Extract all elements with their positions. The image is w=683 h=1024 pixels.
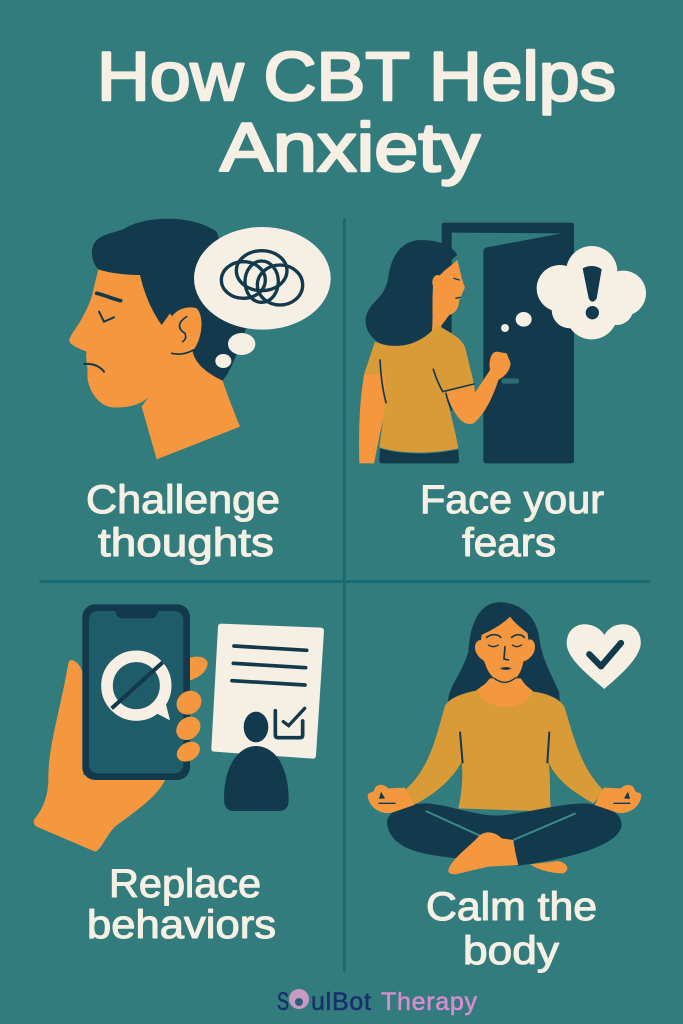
- panel: challenge thoughts: [69, 219, 331, 565]
- title: Anxiety: [220, 109, 481, 186]
- icon: brain logo replacing the letter o: o: [296, 997, 302, 1007]
- label: calm the body: body: [463, 929, 559, 973]
- footer logo: SoulBot Therapy: ulBot: [311, 988, 371, 1016]
- title: How CBT Helps: [97, 38, 616, 115]
- right hand in mudra: [595, 785, 641, 813]
- footer logo: SoulBot Therapy: S: [277, 988, 289, 1016]
- title: [97, 38, 616, 186]
- label: calm the body: [426, 885, 597, 973]
- icon: brain logo replacing the letter o: [289, 989, 309, 1009]
- icon: anxious head in profile with thought bubble: [69, 219, 331, 459]
- label: replace behaviors: behaviors: [87, 903, 276, 947]
- label: face your fears: fears: [462, 521, 556, 565]
- label: challenge thoughts: Challenge: [86, 478, 280, 522]
- label: replace behaviors: Replace: [109, 862, 261, 906]
- footer logo: SoulBot Therapy: [277, 988, 478, 1016]
- panel: face your fears: [359, 223, 646, 565]
- label: face your fears: Face your: [420, 478, 604, 522]
- left hand in mudra: [368, 785, 414, 813]
- label: face your fears: [420, 478, 604, 565]
- icon: woman meditating with heart check: [368, 602, 641, 874]
- icon: hand holding phone with blocked chat symbol: [34, 604, 324, 852]
- label: challenge thoughts: [86, 478, 280, 565]
- panel: replace behaviors: [34, 604, 324, 947]
- label: challenge thoughts: thoughts: [98, 521, 274, 565]
- icon: woman at an open door with alarm cloud: [359, 223, 646, 463]
- panel: calm the body: [368, 602, 641, 973]
- label: calm the body: Calm the: [426, 885, 597, 929]
- label: replace behaviors: [87, 862, 276, 947]
- footer logo: SoulBot Therapy: Therapy: [381, 988, 478, 1016]
